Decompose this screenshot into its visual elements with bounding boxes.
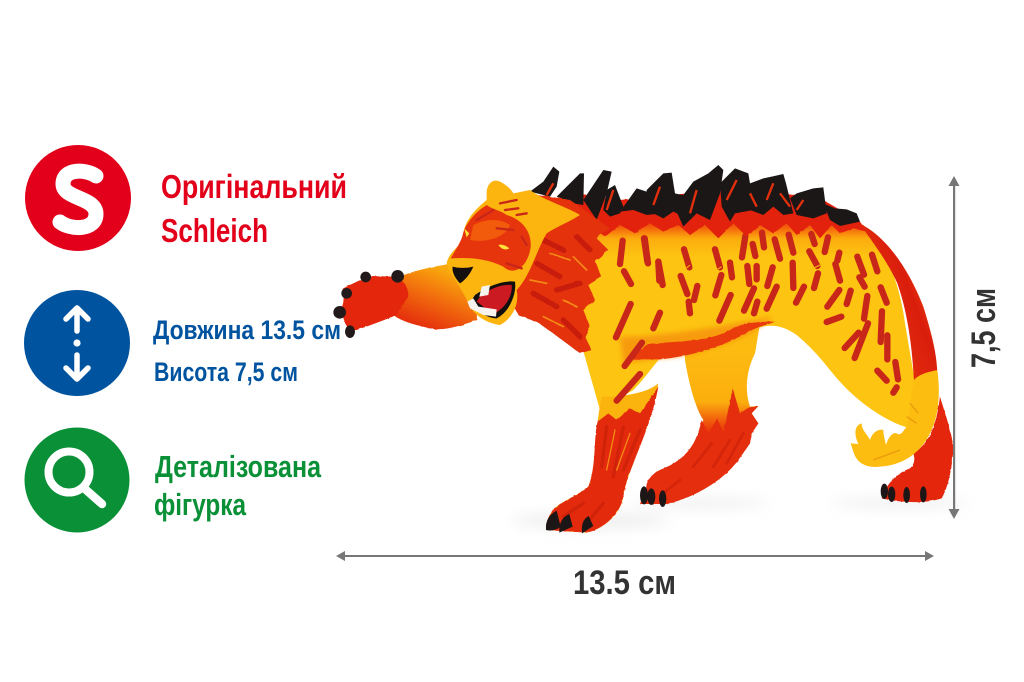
head [447,181,580,325]
tail [851,224,939,467]
flame overlay on hind leg [640,388,758,504]
text: dimensions: Довжина 13.5 см [153,315,341,345]
face markings [451,205,531,271]
tiger figure [333,165,953,533]
icon: original Schleich badge [25,145,131,251]
icon: magnifying glass badge [24,428,130,532]
teeth [467,285,497,317]
body stripes [644,233,898,393]
text: detailed figure: Деталізована [155,449,322,484]
black crystal spikes [530,165,860,227]
mane [507,193,610,353]
heading: original Schleich [161,168,347,249]
heading: original Schleich: Schleich [161,212,268,249]
front body stripes [616,238,660,401]
arrow: height dimension [948,176,960,519]
text: detailed figure: фігурка [154,487,247,522]
heading: original Schleich: Оригінальний [161,168,347,205]
nose [452,267,473,283]
tiger rear: hind legs [640,323,953,507]
near front leg [546,238,660,533]
text: dimensions: Висота 7,5 см [154,357,298,387]
tiger body with back and flanks [520,214,915,427]
arrow: length dimension [336,551,934,561]
ground shadow [510,498,970,528]
text: dimensions [153,315,341,387]
label: length: 13.5 см [573,564,676,602]
text: detailed figure [154,449,322,522]
spikes and lava along back [530,165,867,238]
label: height: 7,5 см [965,288,1003,368]
eyes [464,229,509,249]
head base with ears [447,181,580,325]
flame overlay on front leg [546,387,658,533]
icon: size arrows badge [24,290,130,396]
outstretched arm and paw [333,263,478,338]
open mouth [468,281,515,318]
belly shading [620,317,773,363]
